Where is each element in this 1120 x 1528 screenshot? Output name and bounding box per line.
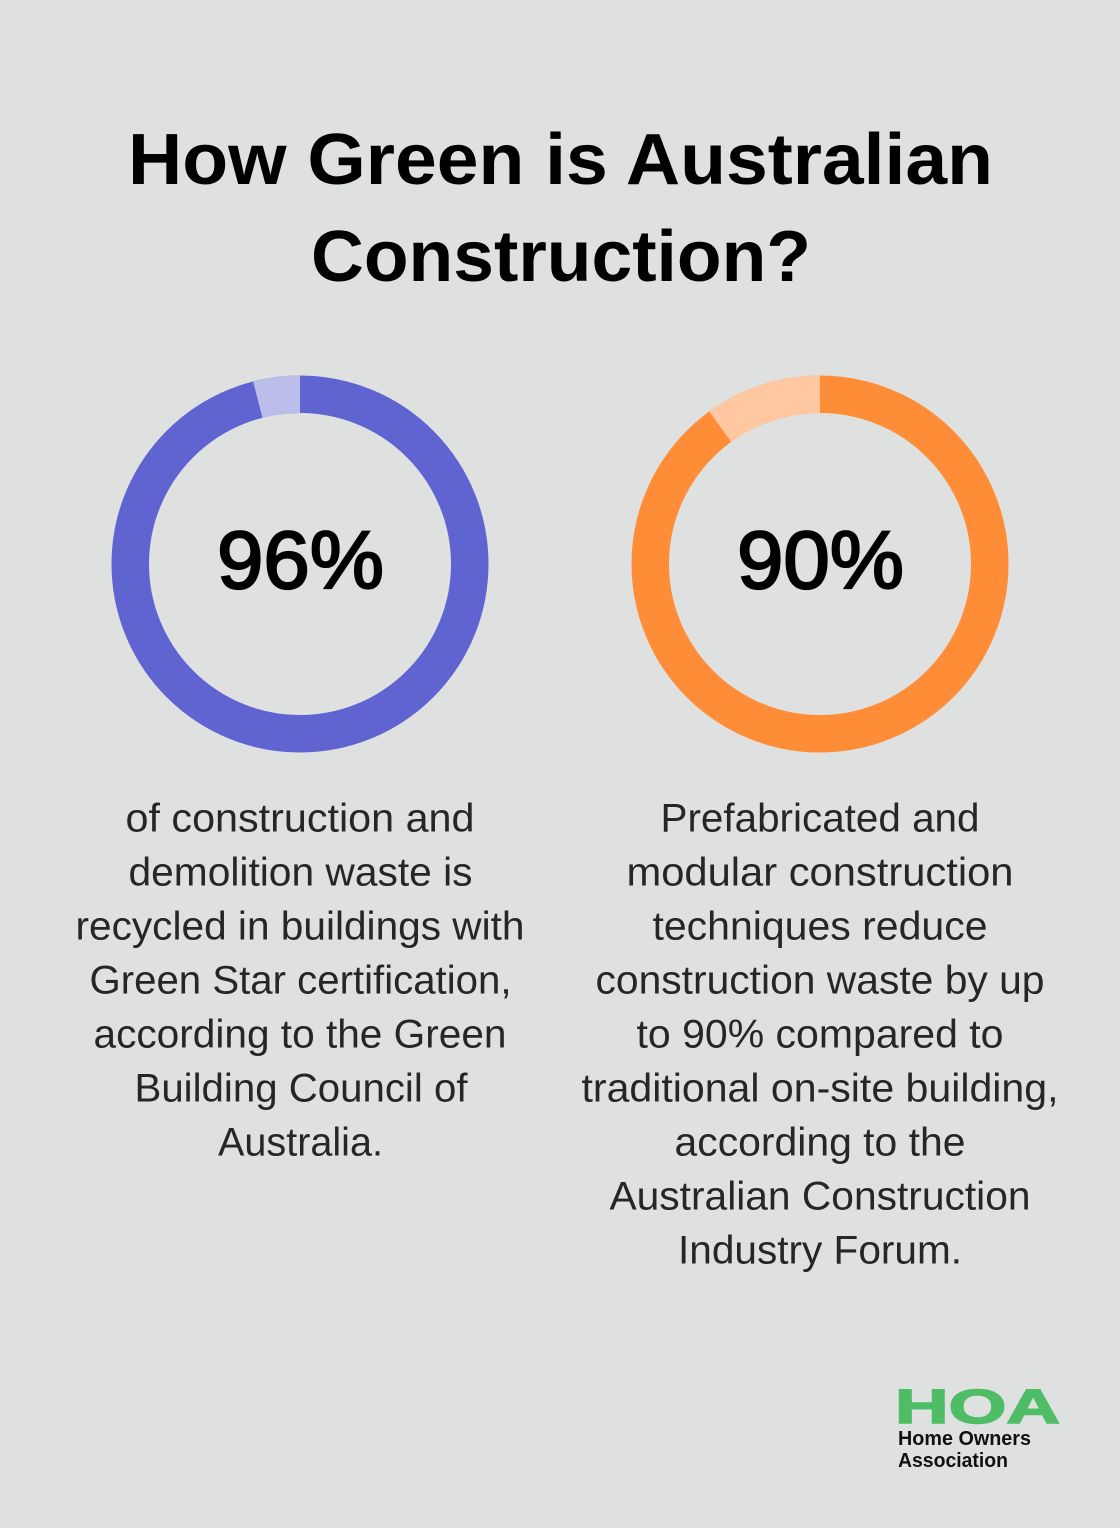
panel: prefabricated construction statistic	[582, 394, 1058, 1272]
description: prefabricated construction	[582, 796, 1058, 1272]
description: prefabricated construction: modular construction	[626, 850, 1014, 894]
logo: Home Owners Association: HOA	[895, 1381, 1060, 1434]
description: prefabricated construction: construction waste by up	[596, 958, 1044, 1002]
description: recycled waste: Australia.	[218, 1120, 383, 1164]
description: recycled waste: demolition waste is	[128, 850, 472, 894]
description: prefabricated construction: Australian Construction	[610, 1174, 1030, 1218]
panel: recycled waste statistic	[76, 394, 524, 1164]
stat value: 90%: 90%	[737, 515, 904, 606]
description: recycled waste: recycled in buildings with	[76, 904, 524, 948]
logo: Home Owners Association: Association	[898, 1450, 1008, 1472]
donut chart: 96%	[130, 394, 470, 734]
description: recycled waste: Green Star certification,	[90, 958, 512, 1002]
description: prefabricated construction: techniques reduce	[652, 904, 988, 948]
description: recycled waste	[76, 796, 524, 1164]
description: recycled waste: of construction and	[126, 796, 474, 840]
description: prefabricated construction: to 90% compared to	[636, 1012, 1004, 1056]
description: recycled waste: Building Council of	[134, 1066, 468, 1110]
description: prefabricated construction: Prefabricated and	[660, 796, 980, 840]
description: prefabricated construction: according to the	[674, 1120, 966, 1164]
description: prefabricated construction: Industry Forum.	[678, 1228, 962, 1272]
title: Construction?	[311, 217, 811, 297]
title	[128, 120, 993, 297]
description: recycled waste: according to the Green	[94, 1012, 506, 1056]
stat value: 96%: 96%	[217, 515, 384, 606]
logo: Home Owners Association: Home Owners	[898, 1428, 1031, 1450]
donut chart: 90%	[650, 394, 990, 734]
title: How Green is Australian	[128, 120, 993, 200]
logo: Home Owners Association	[895, 1381, 1060, 1472]
description: prefabricated construction: traditional on-site building,	[582, 1066, 1058, 1110]
